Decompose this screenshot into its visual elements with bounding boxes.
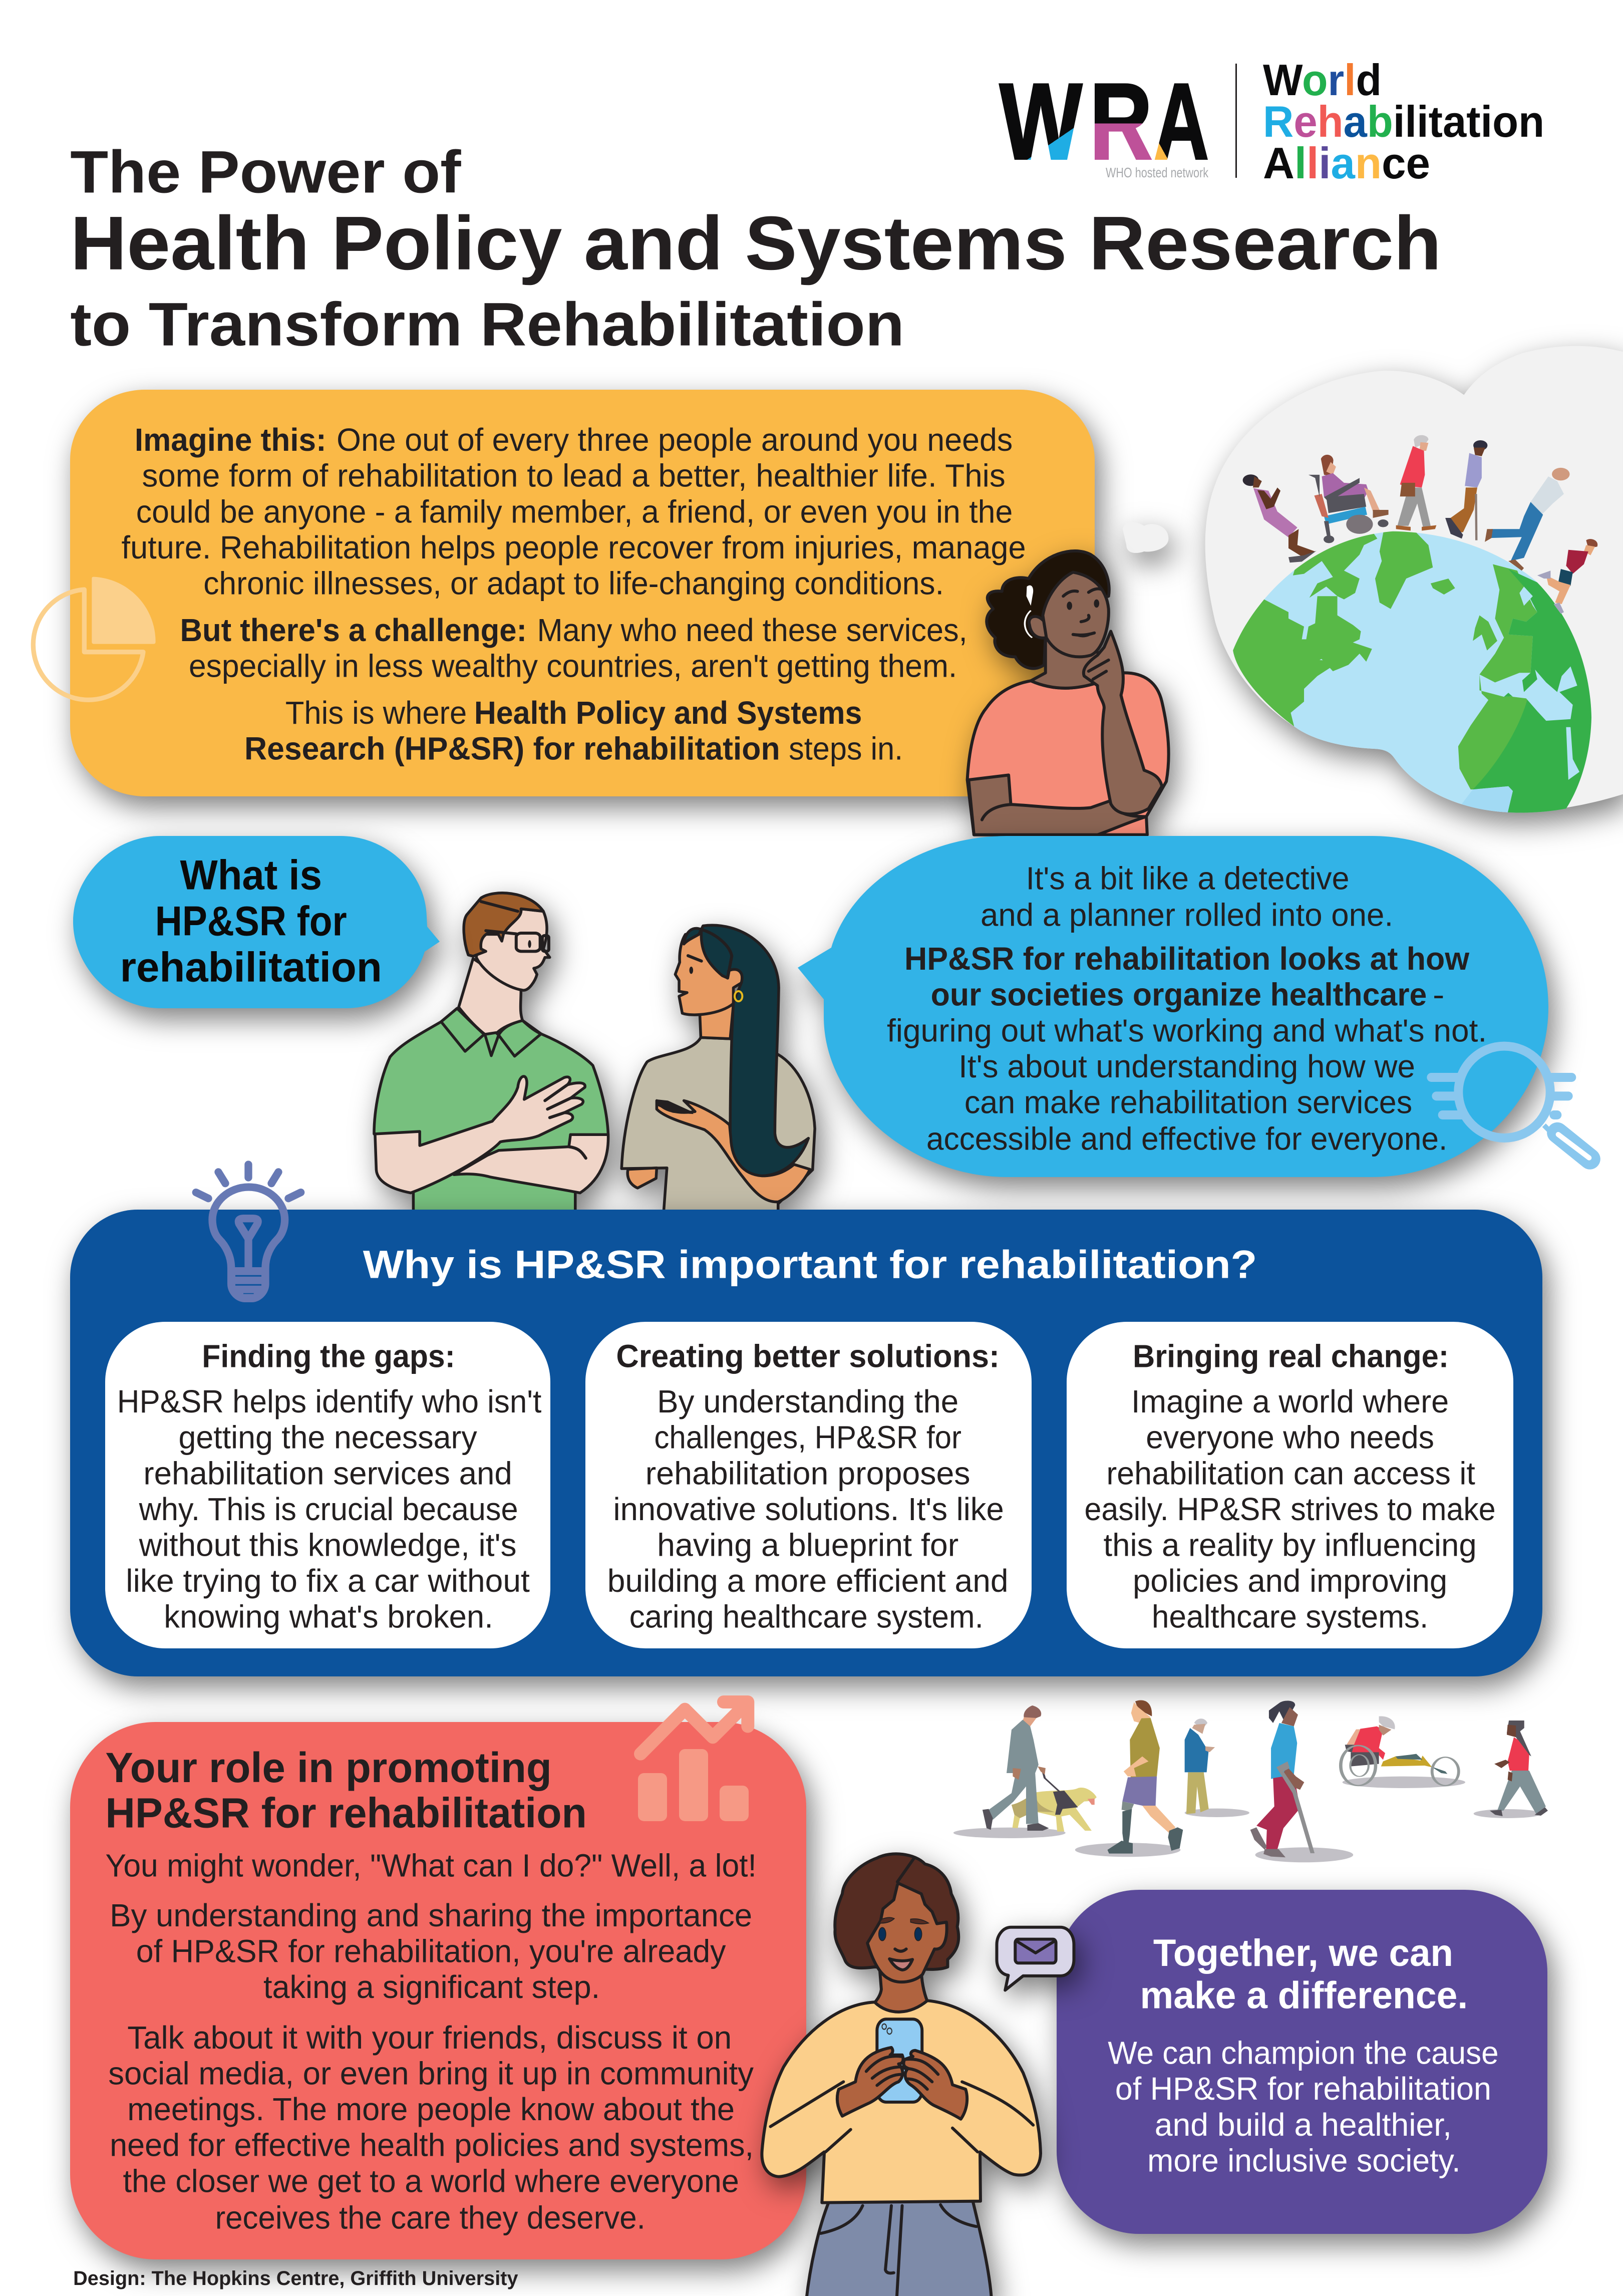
text: imagine this: Many who need these services, [537,612,967,648]
text: your role: social media, or even bring it up in community [108,2055,754,2091]
card: finding the gaps: knowing what's broken. [164,1599,493,1635]
text: explanation: It's about understanding how we [958,1048,1415,1084]
text: imagine this: some form of rehabilitation to lead a better, healthier life. This [142,458,1006,494]
text: together [1108,1932,1499,2178]
text: explanation: and a planner rolled into one. [981,897,1393,933]
text: what is: HP&SR for [155,898,347,944]
text: your role: receives the care they deserve. [215,2199,645,2235]
person: wheelchair racer [1341,1716,1465,1788]
card: creating better solutions [585,1322,1032,1648]
person: woman in purple dress [1243,474,1317,562]
card: creating better solutions: innovative solutions. It's like [613,1491,1004,1527]
illustration: walking people [953,1700,1548,1862]
text: what is [120,851,382,990]
panel: explanation bubble [798,836,1590,1177]
text: imagine this [122,422,1026,767]
person: man with cane [1445,440,1487,540]
text: imagine this: One out of every three people around you needs [337,422,1013,458]
text: imagine this: future. Rehabilitation helps people recover from injuries, manage [122,529,1026,565]
heading: why is HP&SR important: Why is HP&SR important for rehabilitation? [363,1242,1257,1286]
icon: pie chart [33,577,156,700]
text: together: We can champion the cause [1108,2035,1499,2071]
text: what is: rehabilitation [120,944,382,990]
panel: together [1057,1890,1547,2234]
panel: what is HP&SR bubble [73,836,440,1008]
text: imagine this: especially in less wealthy countries, aren't getting them. [189,648,957,684]
logo mark: WRA [1000,61,1209,182]
text: imagine this: Imagine this: [135,422,327,458]
text: explanation: HP&SR for rehabilitation looks at how [904,941,1469,977]
card: bringing real change: Bringing real change: [1133,1338,1449,1374]
text: your role: Talk about it with your friends, discuss it on [127,2020,732,2056]
person: woman with long hair [621,925,815,1211]
person: elder with red jacket [1396,435,1436,530]
text: imagine this: This is where [285,695,467,731]
card: bringing real change [1067,1322,1513,1648]
card: creating better solutions: challenges, HP&SR for [654,1419,961,1456]
text: your role: HP&SR for rehabilitation [105,1789,587,1837]
card: bringing real change: healthcare systems. [1152,1599,1428,1635]
text: imagine this: chronic illnesses, or adapt to life-changing conditions. [203,565,944,601]
card: finding the gaps: HP&SR helps identify who isn't [117,1383,541,1419]
text: explanation: figuring out what's working and what's not. [887,1012,1487,1048]
text: explanation: our societies organize healthcare [931,977,1427,1013]
card: bringing real change: everyone who needs [1146,1419,1434,1456]
card: bringing real change: this a reality by influencing [1103,1527,1477,1563]
logo mark: WRA: W [1000,61,1082,182]
text: what is: What is [180,851,322,898]
illustration: woman with phone [762,1854,1074,2296]
logo wordmark [1263,55,1544,188]
card: finding the gaps: like trying to fix a car without [126,1563,530,1599]
text: your role: By understanding and sharing the importance [110,1897,752,1933]
card: creating better solutions: caring healthcare system. [629,1599,984,1635]
person: running boy [1537,539,1597,614]
illustration: thinking woman [967,551,1169,835]
text: together: and build a healthier, [1155,2107,1452,2143]
title: The Power of [70,139,462,205]
card: creating better solutions: Creating better solutions: [616,1338,1000,1374]
logo wordmark: Alliance [1263,138,1430,188]
text: together: make a difference. [1140,1974,1468,2017]
card: bringing real change: rehabilitation can access it [1106,1455,1475,1491]
text: your role: meetings. The more people know about the [127,2091,735,2127]
text: explanation: - [1433,977,1444,1013]
card: bringing real change: Imagine a world where [1131,1383,1449,1419]
panel: your role [70,1702,806,2259]
text: together: Together, we can [1153,1932,1453,1974]
card: finding the gaps: getting the necessary [179,1419,477,1456]
logo mark: WRA: A [1154,61,1209,182]
card: finding the gaps: why. This is crucial because [139,1491,518,1527]
title [70,139,1442,359]
person: man with guide dog [953,1705,1097,1838]
text: explanation [887,860,1487,1157]
text: your role: of HP&SR for rehabilitation, you're already [136,1933,726,1969]
card: creating better solutions: By understanding the [657,1383,958,1419]
thought bubble [1123,522,1168,553]
text: your role: Your role in promoting [105,1744,552,1791]
text: explanation: accessible and effective for everyone. [926,1121,1447,1157]
logo: World Rehabilitation Alliance [1000,55,1544,188]
logo mark: WRA: WHO hosted network [1106,165,1209,180]
text: imagine this: But there's a challenge: [180,612,527,648]
text: imagine this: Research (HP&SR) for rehabilitation [244,731,780,767]
text: your role: need for effective health policies and systems, [110,2127,754,2163]
card: finding the gaps: without this knowledge, it's [139,1527,517,1563]
logo wordmark: World [1263,55,1382,105]
logo wordmark: Rehabilitation [1263,97,1544,146]
logo mark: WRA: R [1090,61,1152,182]
illustration: man and woman talking [374,893,815,1211]
card: creating better solutions: having a blueprint for [657,1527,958,1563]
icon: magnifying glass [1431,1046,1590,1159]
text: imagine this: steps in. [789,731,903,767]
text: imagine this: could be anyone - a family member, a friend, or even you in the [136,493,1013,529]
title: to Transform Rehabilitation [70,291,904,359]
icon: lightbulb [196,1165,301,1302]
text: imagine this: Health Policy and Systems [474,695,862,731]
panel: why is HP&SR important [70,1165,1542,1676]
person: woman in red [1474,1720,1548,1818]
person: man with jeans [1485,468,1570,570]
text: your role: taking a significant step. [263,1969,600,2005]
text: your role: the closer we get to a world where everyone [123,2163,739,2199]
card: finding the gaps [105,1322,550,1648]
text: together: of HP&SR for rehabilitation [1115,2071,1491,2107]
text: together: more inclusive society. [1147,2142,1461,2178]
person: woman with crutch [1250,1700,1353,1862]
card: bringing real change: easily. HP&SR strives to make [1084,1491,1496,1527]
panel: imagine this [33,390,1095,796]
card: creating better solutions: rehabilitation proposes [645,1455,970,1491]
text: your role: You might wonder, "What can I do?" Well, a lot! [105,1848,757,1884]
icon: growth chart [638,1702,749,1821]
person: wheelchair user [1309,455,1389,543]
text: explanation: can make rehabilitation services [964,1084,1412,1120]
card: bringing real change: policies and improving [1133,1563,1447,1599]
card: creating better solutions: building a more efficient and [607,1563,1009,1599]
text: explanation: It's a bit like a detective [1026,860,1349,896]
card: finding the gaps: rehabilitation services and [143,1455,512,1491]
title: Health Policy and Systems Research [70,201,1442,286]
person: elder with phone [1185,1718,1249,1817]
illustration: globe with people [1205,346,1623,813]
text: your role [105,1744,757,2235]
person: man with prosthetic leg [1075,1700,1183,1857]
footer credit: Design: The Hopkins Centre, Griffith University [73,2267,518,2289]
icon: message bubble [997,1927,1074,1990]
card: finding the gaps: Finding the gaps: [202,1338,455,1374]
person: man [374,893,608,1211]
